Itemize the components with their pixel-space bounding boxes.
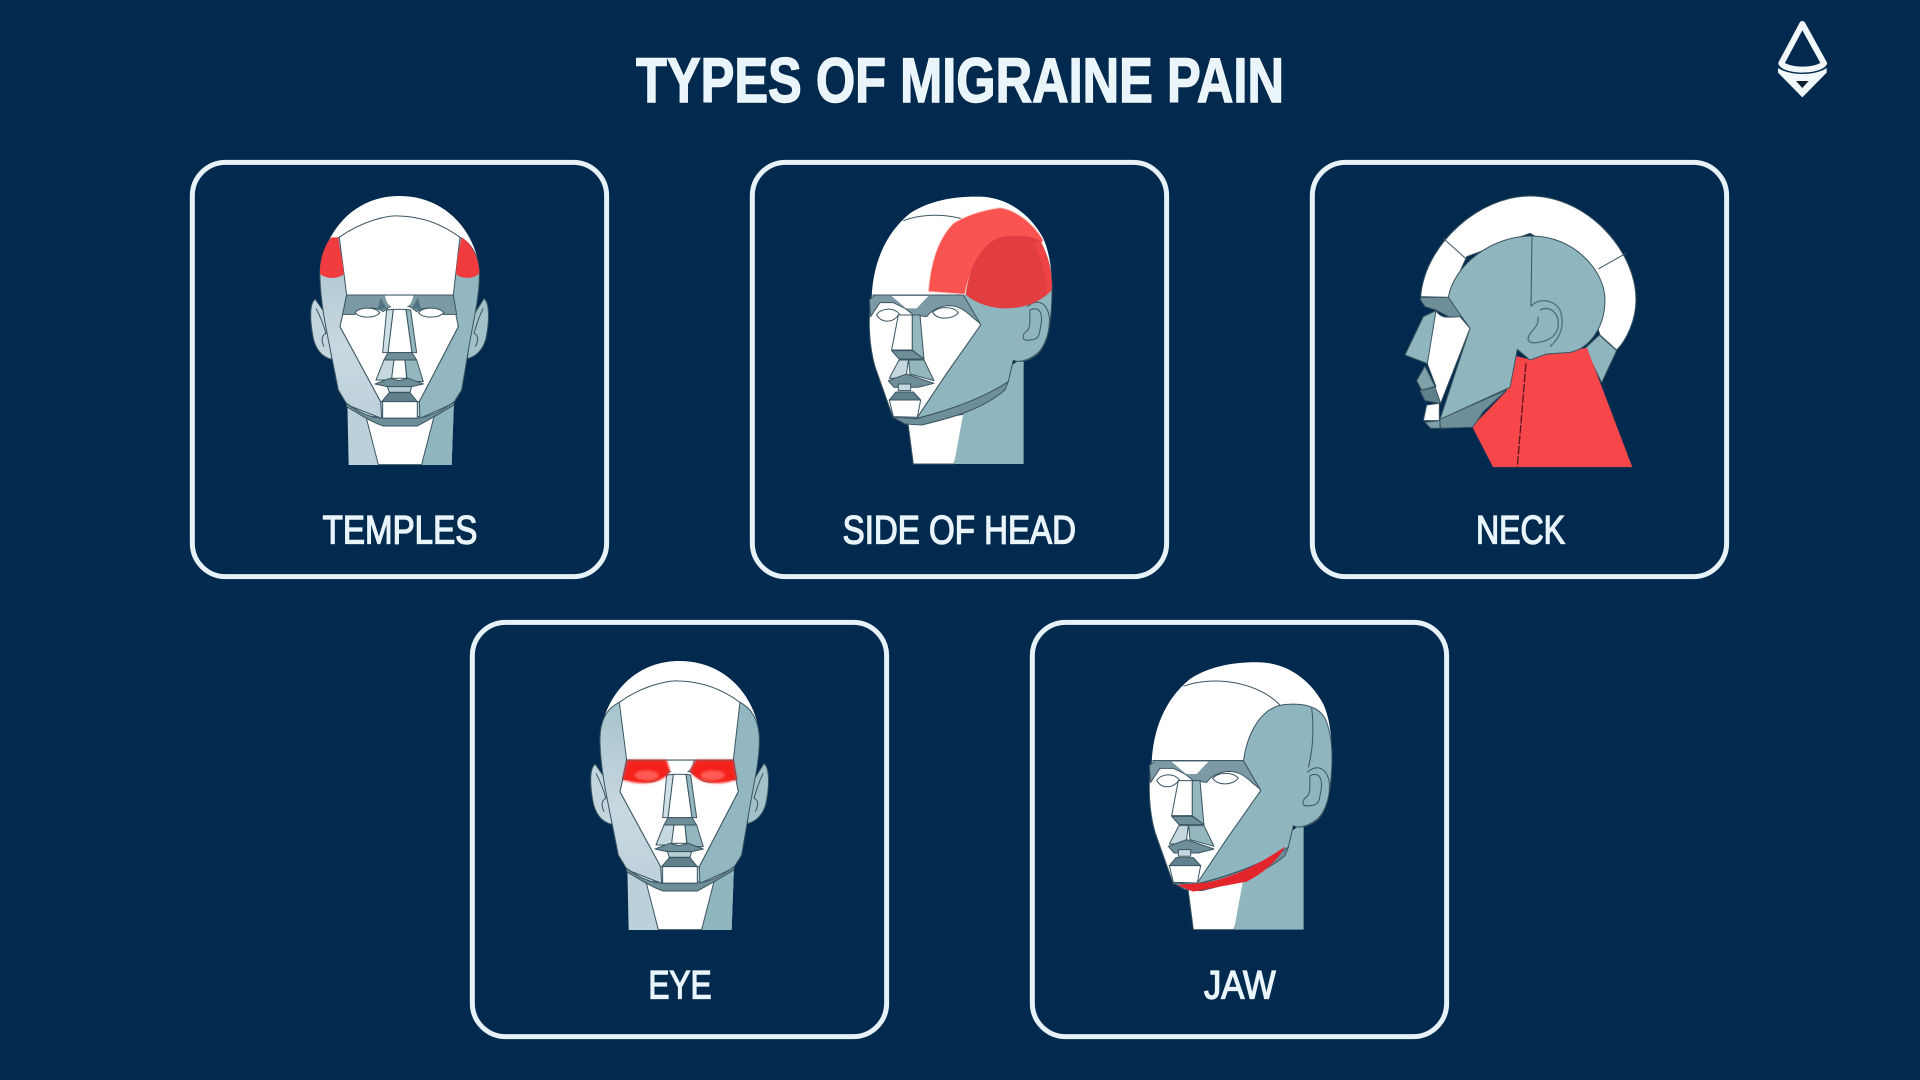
head illustration: neck pain	[1405, 196, 1636, 467]
red temple area: left	[320, 237, 344, 278]
head illustration: jaw pain	[1149, 662, 1332, 930]
panel: eye	[472, 622, 887, 1037]
label: neck: NECK	[1476, 508, 1565, 552]
label: temples: TEMPLES	[323, 508, 477, 552]
neck back segment	[1585, 335, 1617, 383]
red jaw stripe	[1177, 847, 1285, 892]
chin	[1423, 403, 1439, 421]
panel: temples	[192, 162, 607, 577]
panel: side of head	[752, 162, 1167, 577]
label: jaw: JAW	[1204, 963, 1276, 1007]
head side plane	[1440, 236, 1605, 419]
red area: upper side of skull	[928, 208, 1043, 294]
panel: neck	[1312, 162, 1727, 577]
jaw underside	[1439, 390, 1507, 428]
red area: lower side of skull	[966, 236, 1052, 308]
label: eye: EYE	[648, 963, 712, 1007]
red temple area: right	[456, 237, 479, 278]
red eye glow: right	[690, 760, 737, 783]
icon: diamond logo	[1778, 24, 1827, 97]
head illustration: side of head pain	[869, 197, 1052, 464]
panel: jaw	[1032, 622, 1447, 1037]
label: side of head: SIDE OF HEAD	[843, 508, 1076, 552]
face plane	[1427, 311, 1470, 403]
ear	[1528, 301, 1562, 347]
white skull arc	[1421, 196, 1636, 350]
nose	[1405, 311, 1436, 364]
head illustration: temples pain	[311, 196, 488, 465]
title: TYPES OF MIGRAINE PAIN	[636, 46, 1284, 116]
red eye glow: left	[623, 760, 670, 783]
brow	[1421, 297, 1463, 317]
lips and lower nose	[1417, 366, 1435, 390]
head illustration: eye pain	[591, 661, 768, 930]
red neck area	[1473, 348, 1632, 467]
